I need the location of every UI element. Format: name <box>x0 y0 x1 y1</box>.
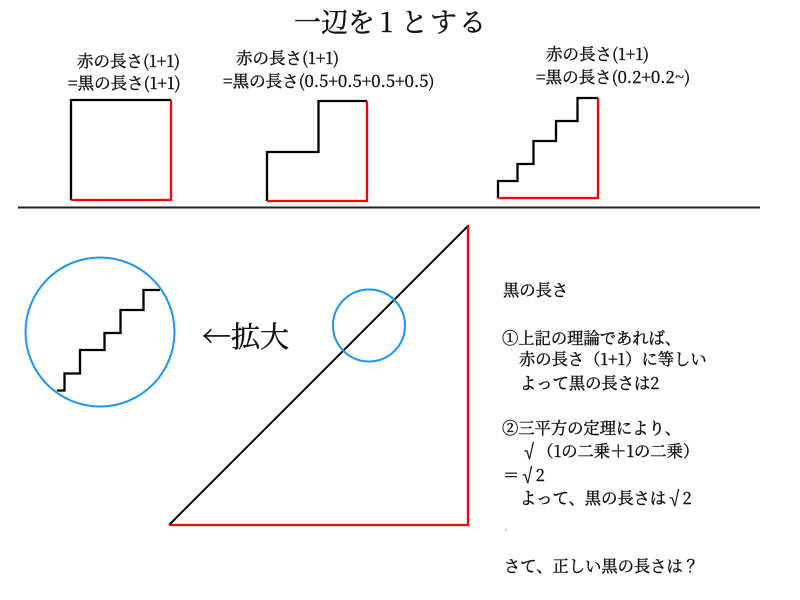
title: 1 <box>380 1 393 40</box>
text block: length of black line: 黒の長さ <box>503 277 568 301</box>
text block: length of black line <box>502 277 707 577</box>
panel: square with side 1 <box>68 48 181 200</box>
title: 一辺を <box>294 1 375 40</box>
one-step shape <box>267 101 367 201</box>
panel: one-step stair <box>223 45 434 201</box>
caption: one-step lengths: =黒の長さ(0.5+0.5+0.5+0.5) <box>223 68 434 92</box>
magnified circle with stairs <box>26 258 174 406</box>
reasoning 1: 赤の長さ（1+1）に等しい <box>519 346 707 370</box>
reasoning 1: ①上記の理論であれば、 <box>502 325 681 349</box>
reasoning 2: よって、黒の長さは√2 <box>520 485 692 509</box>
reasoning 2: ＝√2 <box>503 462 545 486</box>
small red speck <box>505 529 506 530</box>
title: す <box>430 1 457 40</box>
caption: multi-step lengths: 赤の長さ(1+1) <box>546 41 649 65</box>
title: と <box>401 1 428 40</box>
label: magnify arrow: ←拡大 <box>202 315 289 356</box>
closing question: さて、正しい黒の長さは？ <box>504 553 699 577</box>
caption: multi-step lengths: =黒の長さ(0.2+0.2~) <box>536 64 690 88</box>
caption: one-step lengths: 赤の長さ(1+1) <box>236 45 339 69</box>
caption: square lengths: 赤の長さ(1+1) <box>77 48 180 72</box>
reasoning 2: √（1の二乗＋1の二乗） <box>521 438 699 462</box>
multi-step shape <box>498 98 598 198</box>
divider <box>18 206 760 208</box>
reasoning 1: よって黒の長さは2 <box>520 370 659 394</box>
panel: multi-step stair <box>498 41 690 198</box>
reasoning 2: ②三平方の定理により、 <box>502 415 681 439</box>
title: る <box>459 1 486 40</box>
right triangle with zoom circle <box>169 225 468 525</box>
square shape <box>71 100 171 200</box>
caption: square lengths: =黒の長さ(1+1) <box>68 70 181 94</box>
